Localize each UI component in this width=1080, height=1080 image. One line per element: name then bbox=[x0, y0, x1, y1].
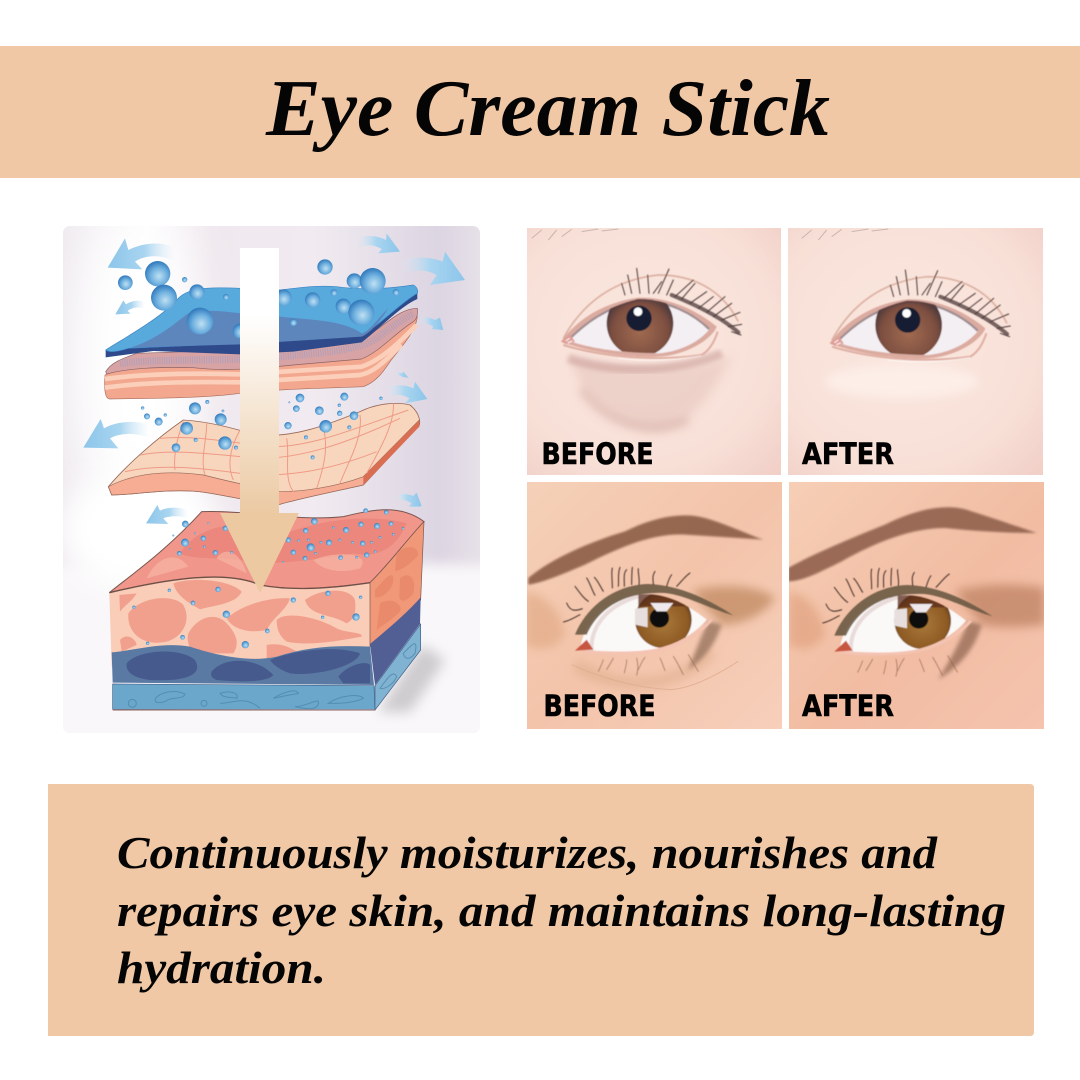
panel: skin layers illustration bbox=[63, 226, 480, 733]
block bubbles bbox=[132, 508, 404, 648]
title banner bbox=[0, 46, 1080, 178]
panel: description bbox=[48, 784, 1034, 1036]
layer: grid sheet bbox=[108, 403, 420, 504]
airflow arrows bbox=[83, 233, 465, 507]
block top surface bbox=[109, 510, 424, 593]
label: after: AFTER bbox=[802, 689, 894, 723]
block front: pink layer bbox=[109, 577, 370, 667]
icon: penetration arrow bbox=[220, 248, 299, 593]
description text: hydration. bbox=[117, 942, 326, 993]
description text: repairs eye skin, and maintains long-lasting bbox=[117, 885, 1006, 936]
label: before: BEFORE bbox=[544, 689, 656, 723]
skin diagram, upper sections bbox=[83, 233, 465, 507]
skin block, lower section bbox=[109, 493, 424, 710]
description text bbox=[117, 827, 1006, 993]
arrows near block bbox=[146, 493, 422, 524]
layer: blue top sheet bbox=[106, 285, 418, 352]
panel: before photo, dark circles bbox=[527, 228, 781, 475]
layer: salmon base bbox=[105, 317, 417, 399]
panel: after photo, wrinkles bbox=[788, 482, 1045, 729]
layer: dark blue edge bbox=[106, 290, 417, 357]
block: light blue base bbox=[113, 684, 375, 710]
panel: before photo, wrinkles bbox=[525, 482, 782, 729]
panel: after photo, dark circles bbox=[788, 228, 1043, 475]
pale under-eye highlight bbox=[829, 368, 974, 396]
layer: speckled pink bbox=[106, 308, 418, 374]
water bubbles bbox=[118, 259, 399, 459]
description text: Continuously moisturizes, nourishes and bbox=[117, 827, 938, 878]
block: dark blue layer bbox=[112, 645, 374, 685]
label: before: BEFORE bbox=[542, 437, 654, 471]
label: after: AFTER bbox=[802, 437, 894, 471]
block right side bbox=[370, 522, 424, 647]
dark circle shading bbox=[572, 358, 726, 426]
title: Eye Cream Stick bbox=[265, 65, 830, 153]
